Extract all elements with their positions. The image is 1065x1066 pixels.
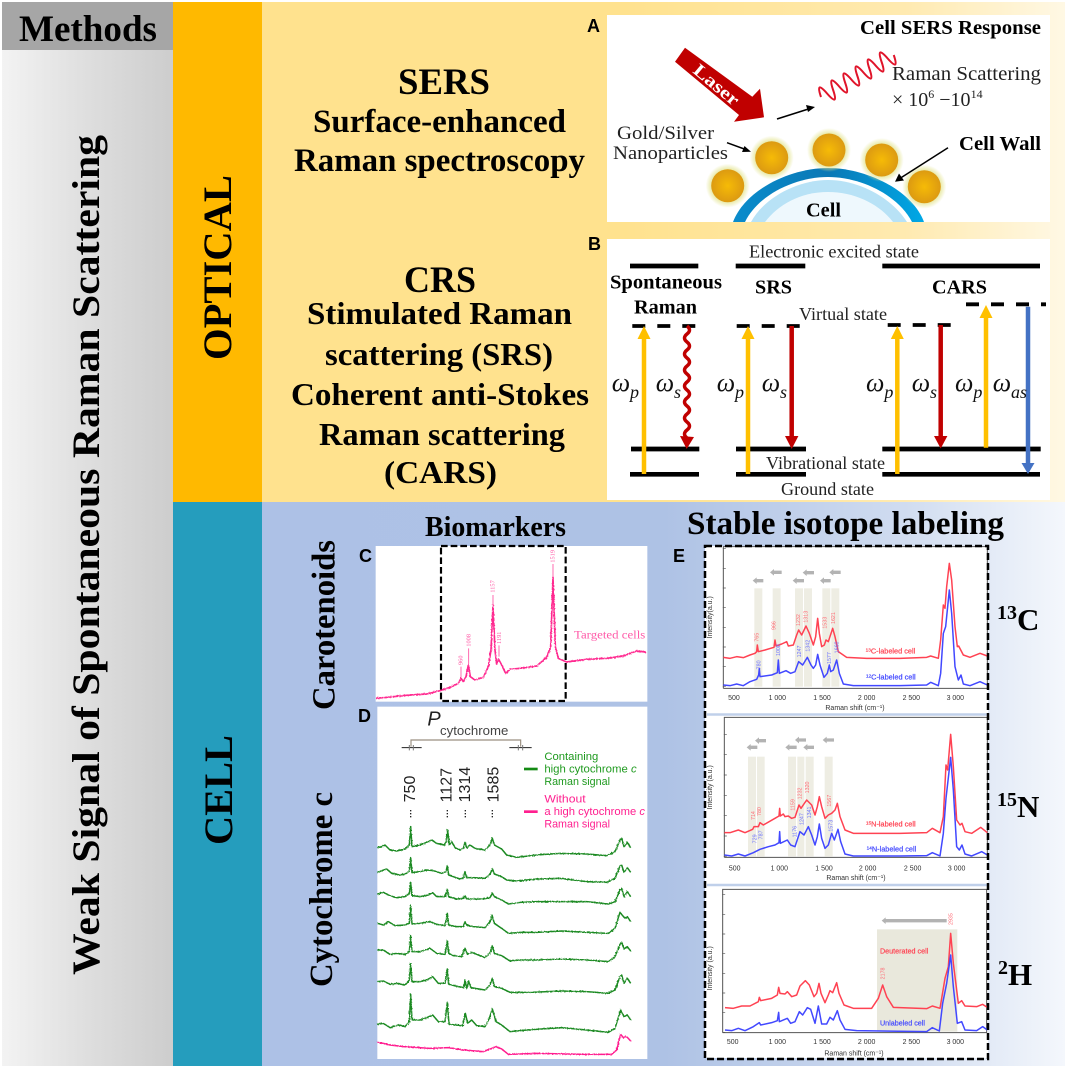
legend: Without (544, 793, 586, 805)
spectra (724, 734, 987, 833)
SERS text block: Surface-enhanced (313, 104, 566, 140)
vertical title: Weak Signal of Spontaneous Raman Scattering (65, 134, 108, 975)
shift arrows (747, 737, 834, 751)
axes text: 500 (727, 1039, 739, 1046)
Raman scattering text: Raman Scattering (892, 63, 1041, 85)
isotope label 2H: H (1008, 957, 1032, 992)
energy levels (630, 266, 1046, 474)
heading: stable isotope labeling: Stable isotope labeling (687, 506, 1004, 542)
axes text (707, 946, 964, 1058)
peak labels: 1567 (827, 795, 833, 807)
peak labels: 1159 (790, 799, 796, 811)
series labels: Deuterated cell (880, 946, 929, 955)
peak labels: 966 (772, 621, 778, 630)
omega labels: ω (912, 368, 930, 397)
omega labels: p (628, 382, 639, 402)
peak labels: 1232 (798, 787, 804, 799)
heading: Cell SERS Response (860, 18, 1041, 39)
nanoparticles (706, 128, 946, 209)
row label: cytochrome c: Cytochrome c (304, 792, 340, 987)
15N plot: 1573 (828, 820, 834, 832)
axes text: 2 000 (859, 866, 877, 873)
axes text: 3 000 (948, 866, 966, 873)
legend: a high cytochrome c (544, 806, 646, 818)
Raman wave (816, 47, 898, 105)
peak labels (751, 781, 833, 820)
15N plot: 1176 (793, 826, 799, 837)
SERS text block (294, 62, 585, 179)
state labels: Electronic excited state (749, 242, 919, 262)
omega labels: s (674, 382, 681, 402)
omega labels: s (780, 382, 787, 402)
CRS text block: Coherent anti-Stokes (291, 376, 589, 412)
panel D: cytochrome c spectra (377, 707, 647, 1059)
spontaneous Raman arrows (638, 326, 694, 474)
cell band (173, 502, 262, 1066)
nanoparticle label (613, 123, 751, 164)
separators (707, 714, 987, 885)
SERS text block: SERS (398, 62, 490, 103)
state labels (749, 242, 919, 499)
CARS arrows (891, 305, 1034, 474)
shaded bands (754, 588, 839, 687)
state labels: Virtual state (799, 304, 887, 324)
series labels: N-labeled cell (871, 820, 916, 829)
heading: biomarkers: Biomarkers (425, 512, 566, 543)
peak labels: 2935 (948, 913, 954, 925)
omega labels: ω (717, 368, 735, 397)
axes text: 2 500 (903, 695, 920, 702)
legend: high cytochrome c (544, 764, 637, 776)
13C plot: 1342 (805, 640, 811, 652)
series labels: 15 (866, 821, 872, 826)
omega labels: ω (762, 368, 780, 397)
axes text (707, 596, 964, 712)
peak labels: 1157 (490, 580, 497, 593)
peak labels: 714 (751, 811, 757, 820)
omega labels: as (1011, 382, 1027, 402)
13C plot: 780 (756, 660, 762, 669)
optical background panel (262, 2, 1065, 502)
shaded band (877, 929, 957, 1032)
cell with wall (733, 168, 924, 222)
13C plot: C-labeled cell (871, 672, 916, 681)
peak labels: 1533 (823, 617, 829, 629)
targeted cells label: Targeted cells (574, 627, 646, 641)
axes text: 2 000 (858, 1039, 876, 1046)
peak labels (755, 611, 837, 642)
axes text: Intensity (a.u.) (707, 765, 714, 809)
axes text: 1 000 (769, 1039, 786, 1046)
peak labels: 1519 (550, 550, 557, 563)
green spectra (377, 827, 631, 1032)
axes text: 1 500 (815, 866, 833, 873)
P cytochrome bracket (402, 709, 532, 750)
spectra (725, 933, 987, 1009)
axes text: 2 500 (903, 1039, 920, 1046)
13C plot (707, 547, 987, 712)
pink spectrum (377, 1034, 631, 1054)
peak labels: 780 (757, 807, 763, 816)
nanoparticle label: Gold/Silver (617, 123, 715, 144)
Raman scattering text: × 10 (892, 89, 928, 111)
peak labels: 960 (458, 655, 465, 665)
legend (524, 751, 646, 831)
Raman scattering text (892, 63, 1041, 111)
axes text: 3 000 (947, 1039, 964, 1046)
laser arrow: Laser (689, 60, 744, 110)
column headings: SRS (755, 276, 792, 298)
peak numbers: 750 (402, 776, 419, 802)
column headings: Spontaneous (610, 271, 722, 293)
state labels: Vibrational state (766, 453, 885, 473)
methods header (2, 2, 174, 50)
panel letter D: D (358, 706, 371, 726)
axes text: Raman shift (cm⁻¹) (826, 875, 886, 882)
panel B: energy diagrams (607, 239, 1050, 500)
Raman scattering text: −10 (934, 89, 971, 111)
axes text: 3 000 (947, 695, 964, 702)
CRS text block: (CARS) (384, 454, 497, 490)
shift arrow (882, 917, 947, 924)
axes text: 1 000 (771, 866, 788, 873)
methods title: Methods (19, 9, 157, 50)
cell background panel (262, 502, 1065, 1066)
omega labels (612, 368, 1027, 402)
axes text: Intensity (a.u.) (707, 946, 714, 990)
CRS text block (291, 260, 589, 490)
panel A: cell SERS response (607, 15, 1050, 222)
15N plot (707, 717, 987, 882)
omega labels: p (882, 382, 893, 402)
axes text: 1 500 (813, 1039, 831, 1046)
row label: carotenoids: Carotenoids (306, 540, 342, 710)
cell label: CELL (196, 735, 241, 845)
peak labels: 1320 (805, 781, 811, 793)
optical band (173, 2, 262, 502)
omega labels: s (930, 382, 937, 402)
legend: Raman signal (544, 819, 610, 831)
omega labels: ω (612, 368, 630, 397)
13C plot: 1247 (797, 645, 803, 657)
15N plot: 14 (867, 846, 872, 851)
15N plot: 1341 (807, 806, 813, 818)
axes text: Raman shift (cm⁻¹) (824, 1051, 884, 1058)
peak labels: 765 (755, 633, 761, 642)
column headings: Raman (634, 296, 698, 318)
omega labels: ω (656, 368, 674, 397)
methods column (2, 2, 174, 1066)
dashed frame (705, 546, 988, 1059)
peak labels (458, 550, 557, 677)
CRS text block: CRS (404, 260, 476, 301)
panel letter B: B (588, 234, 601, 254)
peak numbers: 1127 (439, 768, 456, 802)
axes text: Intensity(a.u.) (707, 596, 714, 638)
CRS text block: Raman scattering (319, 416, 565, 452)
2H plot: Unlabeled cell (880, 1019, 925, 1028)
axes text: 2 500 (904, 866, 922, 873)
pink spectrum (376, 577, 646, 698)
13C plot: 1660 (834, 641, 840, 653)
Raman scattering text: 14 (971, 87, 983, 101)
panel letter C: C (359, 546, 372, 566)
legend: Raman signal (544, 776, 610, 788)
optical label: OPTICAL (195, 175, 240, 360)
cell label: Cell (806, 200, 841, 222)
omega labels: ω (866, 368, 884, 397)
panel C: carotenoid spectrum (376, 546, 647, 702)
SERS text block: Raman spectroscopy (294, 143, 585, 179)
15N plot: N-labeled cell (872, 845, 917, 854)
omega labels: p (733, 382, 744, 402)
15N plot: 1247 (799, 813, 805, 825)
peak labels: 1191 (496, 632, 503, 644)
column headings (610, 271, 987, 318)
legend: Containing (544, 751, 598, 763)
panel letter A: A (587, 16, 600, 36)
peak labels: 2178 (880, 967, 886, 979)
isotope label 15N: N (1017, 789, 1039, 824)
peak numbers (402, 767, 502, 817)
isotope label 13C: 13 (997, 602, 1017, 624)
cell wall label: Cell Wall (959, 133, 1041, 155)
13C plot: 1008 (776, 644, 782, 656)
Raman scattering text: 6 (928, 87, 934, 101)
panel letter E: E (673, 546, 685, 566)
spectra (723, 563, 987, 658)
peak numbers: 1585 (485, 767, 502, 802)
CRS text block: scattering (SRS) (325, 336, 553, 372)
series labels: C-labeled cell (871, 646, 916, 655)
P cytochrome bracket: P (427, 709, 441, 731)
scatter arrow (777, 105, 815, 119)
isotope label 13C: C (1017, 602, 1039, 637)
omega labels: p (971, 382, 982, 402)
panel E: isotope labelling spectra (705, 546, 988, 1059)
series labels: 13 (866, 647, 871, 652)
axes text: 500 (728, 695, 740, 702)
column headings: CARS (932, 276, 987, 298)
peak labels: 1313 (804, 611, 810, 623)
shift arrows (753, 569, 841, 584)
peak numbers: 1314 (457, 767, 474, 802)
P cytochrome bracket: cytochrome (440, 724, 508, 738)
axes text (707, 765, 966, 882)
nanoparticle label: Nanoparticles (613, 143, 728, 164)
isotope label 15N: 15 (997, 789, 1017, 811)
axes text: 1 000 (769, 695, 786, 702)
2H plot (707, 889, 987, 1058)
peak labels: 1008 (466, 634, 473, 647)
axes text: Raman shift (cm⁻¹) (825, 705, 885, 712)
13C plot: 12 (866, 673, 872, 678)
15N plot: 729 (753, 834, 759, 843)
axes text: 1 500 (813, 695, 831, 702)
peak labels: 1232 (796, 614, 802, 626)
cell wall label (895, 133, 1041, 182)
dashed region (441, 546, 566, 701)
shaded bands (748, 757, 833, 857)
axes text: 500 (729, 866, 741, 873)
state labels: Ground state (781, 479, 874, 499)
SRS arrows (742, 326, 798, 474)
13C plot: 1577 (827, 652, 833, 664)
omega labels: ω (993, 368, 1011, 397)
isotope label 2H: 2 (998, 957, 1008, 979)
peak labels: 1621 (831, 612, 837, 624)
axes text: 2 000 (858, 695, 876, 702)
peak labels (880, 913, 954, 979)
omega labels: ω (955, 368, 973, 397)
15N plot: 787 (758, 830, 764, 839)
laser arrow (675, 48, 764, 122)
CRS text block: Stimulated Raman (307, 295, 572, 331)
